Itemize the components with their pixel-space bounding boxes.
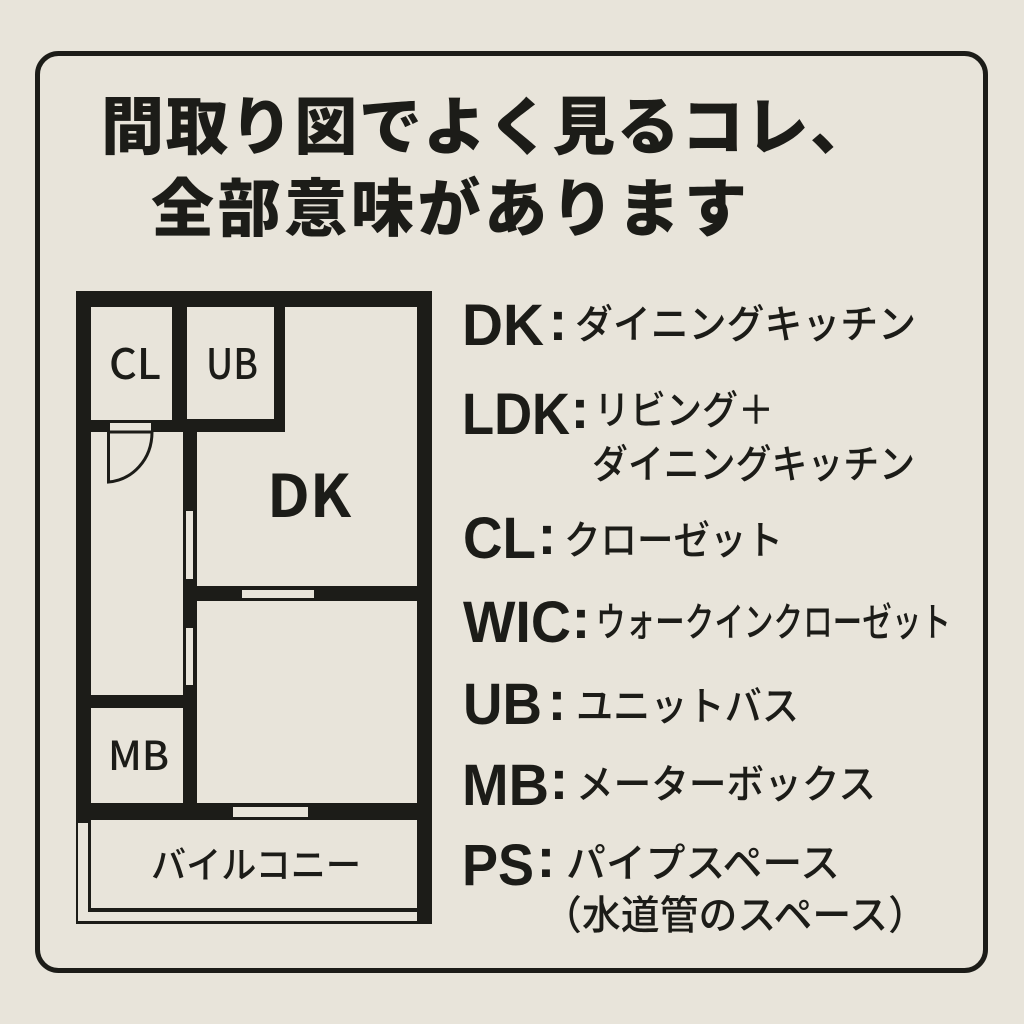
legend: CL	[463, 503, 783, 571]
room: balcony	[91, 820, 417, 908]
legend: DK: ダイニングキッチン	[575, 292, 916, 350]
legend: PS: :	[537, 826, 555, 889]
title	[101, 77, 873, 250]
window: balcony wall	[233, 807, 308, 817]
room: meter box	[91, 708, 183, 803]
room: dining kitchen	[197, 307, 417, 586]
label: DK: DK	[267, 449, 352, 534]
label: MB: MB	[108, 724, 169, 782]
legend: LDK: ダイニングキッチン	[592, 432, 915, 490]
legend: LDK: LDK	[462, 382, 570, 447]
label: CL: CL	[109, 331, 161, 392]
legend: DK: :	[549, 289, 567, 352]
label: balcony: バイルコニー	[151, 835, 361, 889]
balcony outer strip	[78, 823, 417, 921]
window: corridor lower	[186, 628, 193, 685]
legend	[462, 289, 951, 941]
room: closet	[91, 307, 172, 420]
legend: WIC: :	[572, 587, 590, 650]
window: corridor upper	[186, 511, 193, 579]
legend: LDK: リビング＋	[594, 378, 774, 436]
legend: UB	[463, 669, 799, 737]
legend: UB: ユニットバス	[576, 674, 799, 732]
legend: PS: （水道管のスペース）	[543, 883, 927, 941]
title: 間取り図でよく見るコレ、	[101, 77, 873, 168]
legend: PS: PS	[462, 833, 534, 898]
legend: CL: CL	[463, 506, 536, 571]
legend: MB: MB	[462, 753, 549, 818]
label: UB: UB	[206, 331, 258, 392]
room: unit bath	[187, 307, 274, 419]
legend: PS	[462, 826, 927, 941]
legend: LDK: :	[571, 377, 589, 440]
legend: WIC	[463, 587, 951, 655]
floor plan	[76, 291, 432, 924]
icon: door swing	[108, 431, 152, 482]
legend: MB: メーターボックス	[576, 752, 876, 810]
legend: DK	[462, 289, 916, 358]
room: main room	[197, 601, 417, 803]
door opening	[110, 423, 151, 431]
legend: WIC: WIC	[463, 590, 571, 655]
legend: CL: :	[538, 503, 556, 566]
legend: DK: DK	[462, 293, 544, 358]
window: kitchen wall	[242, 590, 314, 598]
legend: PS: パイプスペース	[566, 831, 840, 889]
legend: MB: :	[550, 748, 568, 811]
legend: LDK	[462, 377, 915, 490]
title: 全部意味があります	[151, 159, 747, 250]
legend: MB	[462, 748, 876, 818]
legend: UB: :	[548, 669, 566, 732]
room: corridor	[91, 432, 183, 695]
legend: UB: UB	[463, 672, 542, 737]
legend: CL: クローゼット	[564, 508, 783, 566]
